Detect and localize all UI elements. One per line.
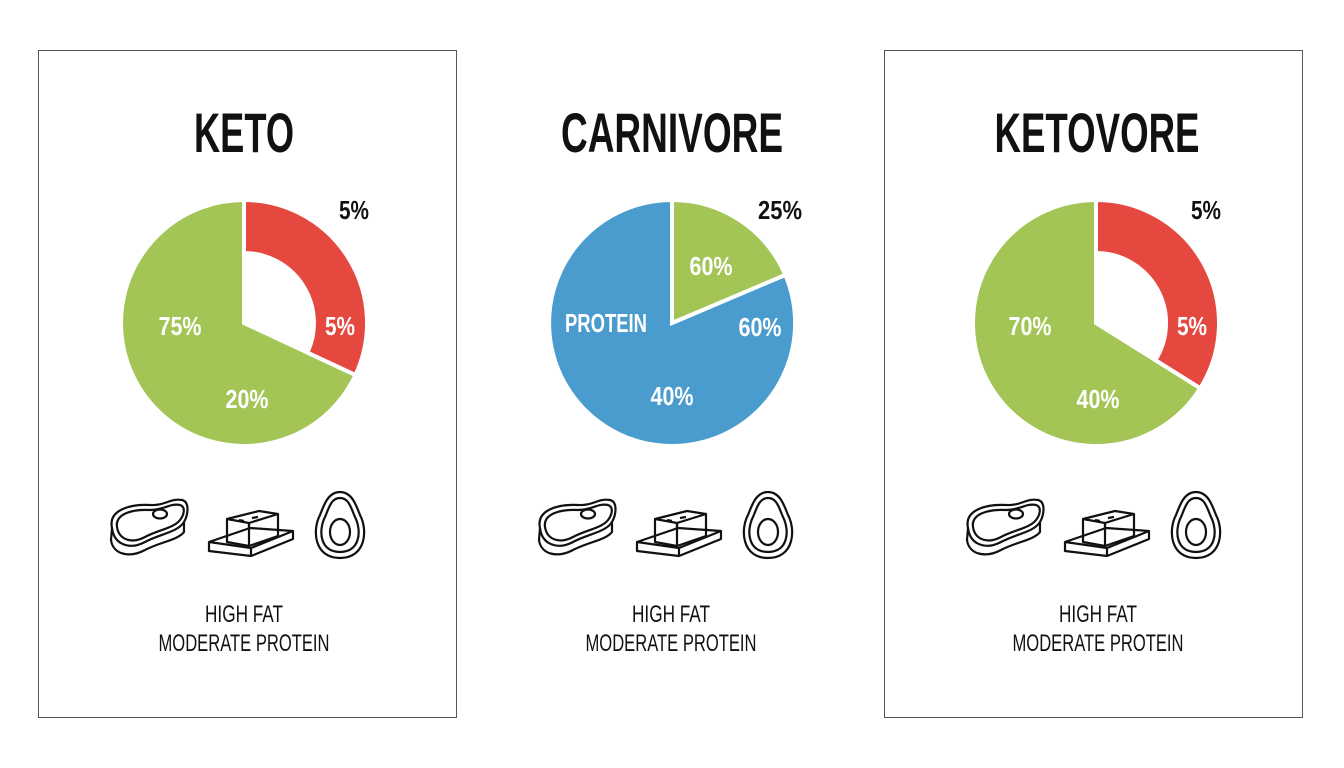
pie chart: keto: 20%: [226, 384, 268, 414]
text: keto description: HIGH FAT: [205, 601, 283, 628]
pie chart: keto: 75%: [158, 311, 202, 341]
text: keto description: [158, 601, 330, 657]
text: ketovore description: MODERATE PROTEIN: [1012, 630, 1184, 657]
text: ketovore description: HIGH FAT: [1059, 601, 1137, 628]
panel: ketovore: [884, 50, 1302, 718]
pie chart: carnivore: 60%: [690, 251, 732, 281]
text: carnivore description: HIGH FAT: [632, 601, 710, 628]
pie chart: carnivore: PROTEIN: [565, 308, 647, 338]
panel: carnivore: [539, 101, 802, 657]
pie chart: carnivore: 25%: [758, 195, 802, 225]
pie chart: keto: 5%: [339, 195, 369, 225]
pie chart: ketovore: 5%: [1177, 311, 1207, 341]
text: ketovore description: [1012, 601, 1184, 657]
text: carnivore description: MODERATE PROTEIN: [586, 630, 756, 657]
text: keto description: MODERATE PROTEIN: [158, 630, 330, 657]
title: ketovore: KETOVORE: [994, 101, 1200, 164]
text: carnivore description: [586, 601, 756, 657]
pie chart: carnivore: 40%: [650, 381, 694, 411]
title: carnivore: CARNIVORE: [561, 101, 783, 164]
icons: steak, butter, avocado: [111, 492, 364, 558]
pie chart: ketovore: 5%: [1191, 195, 1221, 225]
pie chart: ketovore: 70%: [1008, 311, 1052, 341]
pie chart: carnivore: [549, 195, 802, 446]
panel: keto: [38, 50, 456, 718]
icons: steak, butter, avocado: [539, 492, 792, 558]
pie chart: keto: [121, 195, 369, 446]
title: keto: KETO: [194, 101, 294, 164]
pie chart: keto: 5%: [325, 311, 355, 341]
pie chart: ketovore: [973, 195, 1221, 446]
pie chart: carnivore: 60%: [738, 312, 782, 342]
icons: steak, butter, avocado: [967, 492, 1220, 558]
pie chart: ketovore: 40%: [1076, 384, 1120, 414]
